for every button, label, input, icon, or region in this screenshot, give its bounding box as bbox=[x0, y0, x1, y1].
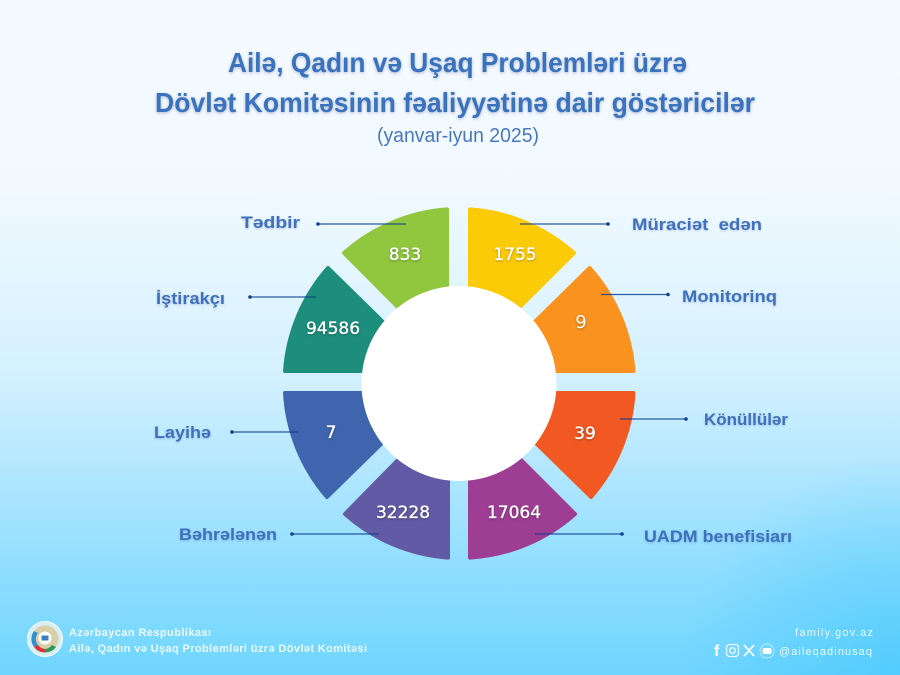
labels: İştirakçı bbox=[156, 289, 225, 308]
icon: X bbox=[744, 645, 754, 656]
footer: social icons bbox=[714, 643, 774, 660]
values: 1755 bbox=[493, 245, 537, 265]
segment: İştirakçı bbox=[285, 268, 433, 371]
subtitle: (yanvar-iyun 2025) bbox=[377, 125, 539, 147]
footer: organisation name: Ailə, Qadın və Uşaq Problemləri üzrə Dövlət Komitəsi bbox=[69, 643, 367, 655]
segment: Monitorinq bbox=[485, 268, 634, 371]
segment: Layihə bbox=[285, 393, 433, 497]
values: 32228 bbox=[376, 503, 430, 523]
values: 39 bbox=[574, 424, 596, 444]
title bbox=[155, 47, 755, 118]
segment: UADM benefisiarı bbox=[470, 409, 575, 558]
labels: Könüllülər bbox=[704, 410, 788, 429]
values bbox=[306, 245, 596, 523]
footer: website: family.gov.az bbox=[795, 627, 873, 639]
title: Ailə, Qadın və Uşaq Problemləri üzrə bbox=[228, 47, 687, 78]
labels: Monitorinq bbox=[682, 287, 777, 306]
labels: Tədbir bbox=[241, 213, 300, 232]
labels: Bəhrələnən bbox=[179, 525, 277, 544]
values: 7 bbox=[326, 423, 336, 443]
labels: UADM benefisiarı bbox=[644, 527, 792, 546]
footer: organisation name: Azərbaycan Respublikası bbox=[69, 627, 211, 639]
connector lines bbox=[230, 222, 688, 536]
labels: Müraciət edən bbox=[632, 215, 762, 234]
values: 17064 bbox=[487, 503, 541, 523]
labels: Layihə bbox=[154, 423, 211, 442]
footer: social handle: @aileqadinusaq bbox=[779, 646, 872, 658]
icon: facebook: f bbox=[714, 643, 720, 660]
segment: Bəhrələnən bbox=[345, 409, 448, 558]
values: 833 bbox=[389, 245, 421, 265]
icon: youtube bbox=[760, 644, 774, 658]
centre circle bbox=[362, 286, 556, 481]
donut chart bbox=[285, 209, 634, 558]
title: Dövlət Komitəsinin fəaliyyətinə dair göstəricilər bbox=[155, 87, 755, 118]
values: 94586 bbox=[306, 319, 360, 339]
values: 9 bbox=[575, 312, 587, 333]
labels bbox=[154, 213, 792, 546]
icon: state committee emblem bbox=[28, 622, 62, 656]
segment: Müraciət edən bbox=[470, 209, 574, 356]
segment: Tədbir bbox=[344, 209, 447, 356]
icon: instagram bbox=[726, 644, 738, 656]
footer: organisation name bbox=[69, 627, 367, 655]
segment: Könüllülər bbox=[485, 393, 634, 497]
